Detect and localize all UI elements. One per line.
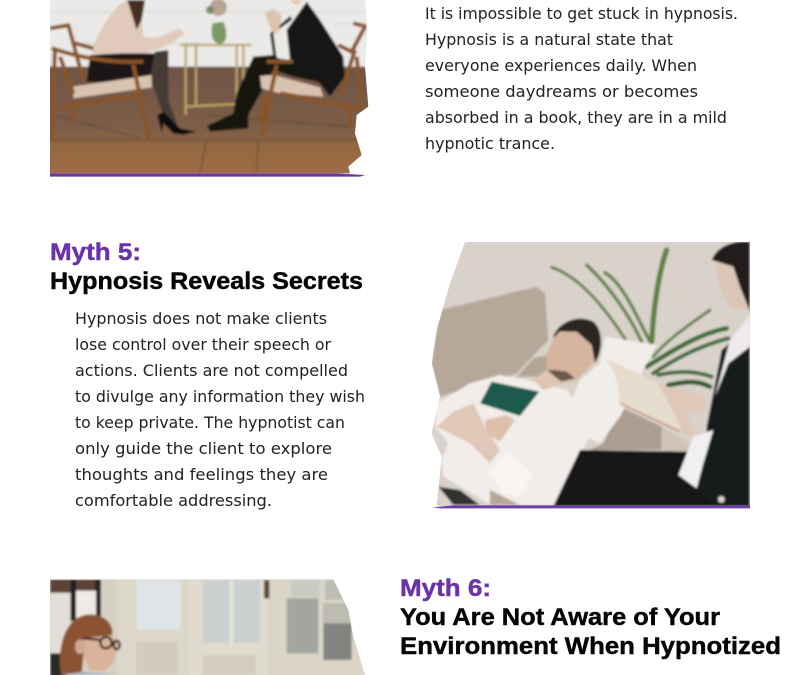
- text block: myth 5 explanation: lose control over their speech or: [75, 335, 331, 354]
- green book: [480, 382, 539, 416]
- purple underline: [433, 505, 750, 508]
- photo: woman with glasses: [40, 577, 373, 675]
- therapist head and hair: [715, 257, 748, 310]
- heading: myth 6: Environment When Hypnotized: [400, 633, 781, 660]
- heading: myth 6: [400, 575, 781, 660]
- heading: myth 6: You Are Not Aware of Your: [400, 604, 720, 631]
- woman hair and face: [60, 614, 112, 675]
- purple underline: [50, 173, 365, 177]
- text block: myth 5 explanation: actions. Clients are not compelled: [75, 361, 348, 380]
- woman glasses: [83, 637, 120, 649]
- heading: myth 5: [50, 239, 363, 295]
- man: [270, 2, 345, 97]
- door 1: [117, 579, 187, 675]
- text block: myth 4 explanation: It is impossible to get stuck in hypnosis.: [425, 4, 738, 23]
- text block: myth 4 explanation: everyone experiences daily. When: [425, 56, 697, 75]
- man's body: [435, 375, 590, 505]
- text block: myth 5 explanation: Hypnosis does not make clients: [75, 309, 327, 328]
- heading: myth 5: Myth 5:: [50, 239, 141, 266]
- photo: client lying on couch with therapist: [420, 240, 753, 510]
- sofa cushion: [432, 287, 548, 397]
- man's head: [547, 330, 597, 383]
- plant: [552, 250, 728, 387]
- couch base: [438, 487, 480, 505]
- white pillow: [572, 337, 657, 443]
- text block: myth 5 explanation: to keep private. The hypnotist can: [75, 413, 345, 432]
- open book: [607, 358, 682, 432]
- text block: myth 5 explanation: only guide the client to explore: [75, 439, 332, 458]
- heading: myth 6: Myth 6:: [400, 575, 491, 602]
- photo: therapist and client in chairs: [40, 0, 377, 177]
- door 3: [270, 579, 367, 675]
- text block: myth 4 explanation: [425, 4, 738, 153]
- therapist hand: [658, 385, 707, 437]
- woman: [92, 0, 185, 57]
- text block: myth 4 explanation: someone daydreams or becomes: [425, 82, 698, 101]
- therapist torso: [700, 343, 750, 498]
- text block: myth 5 explanation: to divulge any information they wish: [75, 387, 365, 406]
- text block: myth 4 explanation: absorbed in a book, they are in a mild: [425, 108, 727, 127]
- table: [180, 45, 252, 115]
- text block: myth 4 explanation: hypnotic trance.: [425, 134, 555, 153]
- right chair: [260, 75, 323, 97]
- text block: myth 5 explanation: comfortable addressing.: [75, 491, 272, 510]
- therapist legs: [552, 448, 715, 506]
- left chair: [73, 75, 152, 98]
- door 2: [188, 579, 268, 675]
- text block: myth 5 explanation: [75, 309, 365, 510]
- text block: myth 4 explanation: Hypnosis is a natural state that: [425, 30, 673, 49]
- text block: myth 5 explanation: thoughts and feelings they are: [75, 465, 328, 484]
- heading: myth 5: Hypnosis Reveals Secrets: [50, 268, 363, 295]
